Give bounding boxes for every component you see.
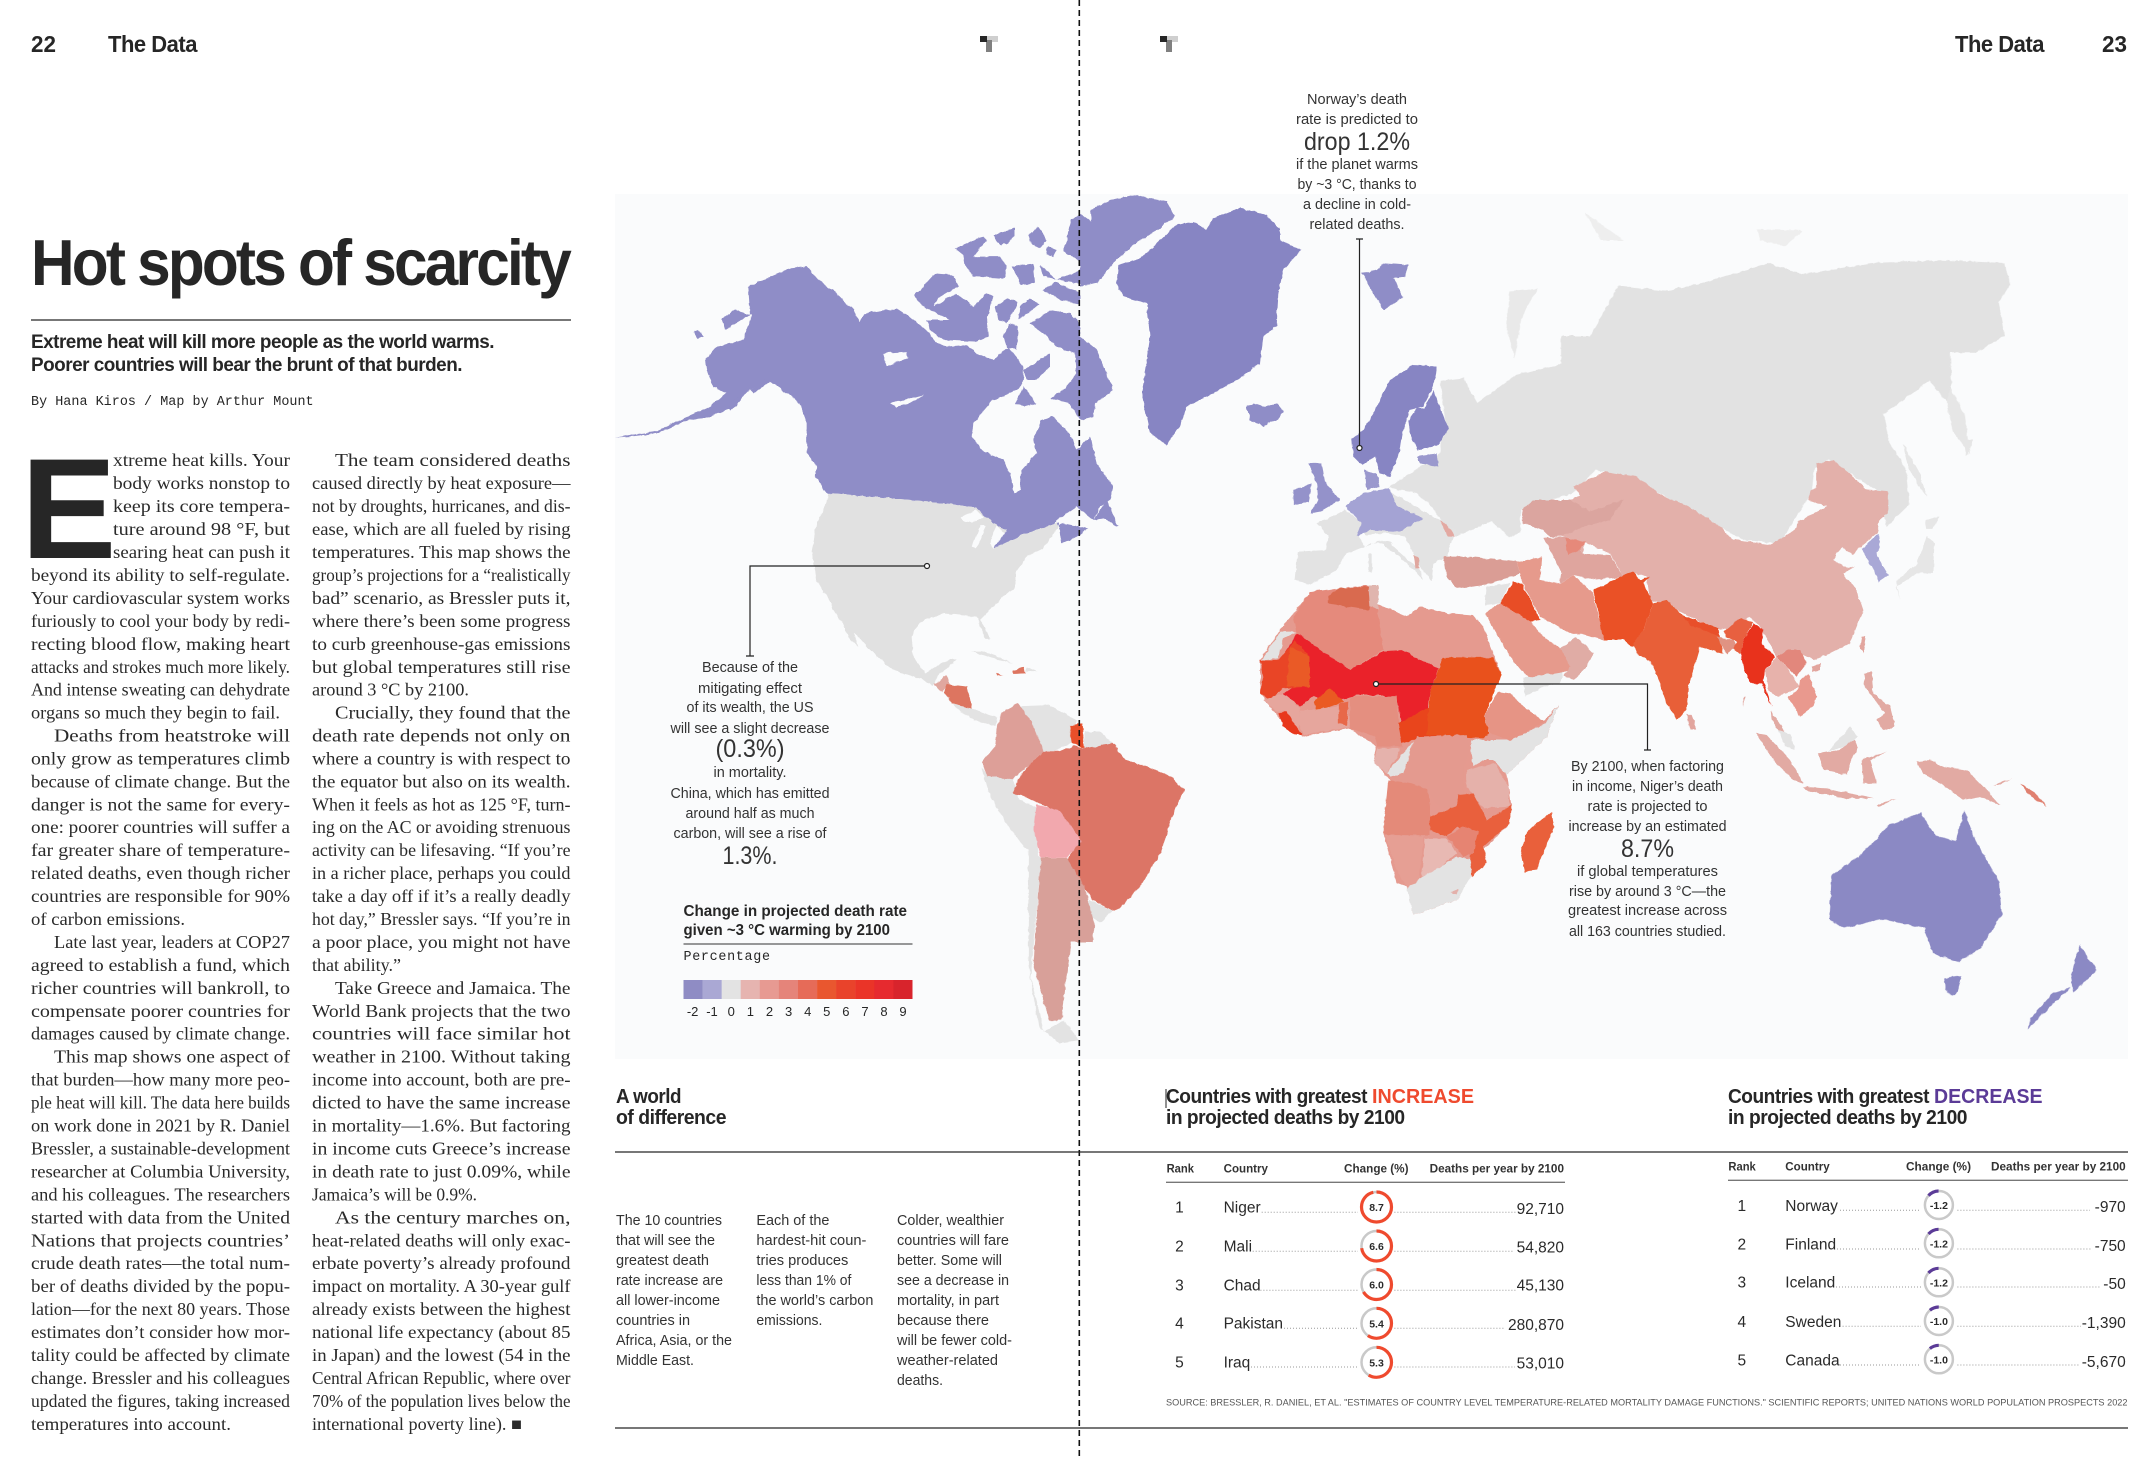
row: Mali: 54,820 xyxy=(1517,1240,1564,1257)
legend: death rate colour scale: 7 xyxy=(861,1004,869,1019)
table header: Change (%) xyxy=(1906,1162,1971,1174)
text block: description column 2: hardest-hit coun- xyxy=(756,1233,867,1249)
text block: description column 2: less than 1% of xyxy=(756,1273,852,1289)
body text column 1: tality could be affected by climate xyxy=(31,1345,290,1365)
body text column 2: take a day off if it’s a really deadly xyxy=(312,886,571,906)
body text column 2: where there’s been some progress xyxy=(312,611,571,631)
row: Iceland: Iceland xyxy=(1785,1275,1835,1292)
text block: description column 3: countries will fare xyxy=(897,1233,1009,1249)
row: Mali: Mali xyxy=(1224,1239,1252,1256)
row: Canada: Canada xyxy=(1785,1353,1840,1370)
icon: right T logo xyxy=(1160,36,1178,52)
body text column 1: of carbon emissions. xyxy=(31,909,185,929)
callout: Niger: if global temperatures xyxy=(1577,864,1718,880)
legend: death rate colour scale: 3 xyxy=(785,1004,792,1019)
callout: US and China xyxy=(670,564,930,870)
body text column 1: related deaths, even though richer xyxy=(31,863,290,883)
header: left page number and section: 22 xyxy=(31,31,56,57)
body text column 1: estimates don’t consider how mor- xyxy=(31,1322,290,1342)
body text column 1: one: poorer countries will suffer a xyxy=(31,817,290,837)
row: Chad: 45,130 xyxy=(1517,1278,1564,1295)
row: Mali: 6.6 xyxy=(1369,1241,1384,1253)
map: Africa xyxy=(1260,585,1558,915)
header: left page number and section xyxy=(31,31,198,57)
text block: description column 2: Each of the xyxy=(756,1213,829,1229)
callout: US and China: China, which has emitted xyxy=(670,786,830,802)
callout: US and China: will see a slight decrease xyxy=(670,721,830,737)
callout: Norway: Norway’s death xyxy=(1307,92,1407,108)
callout: Norway: related deaths. xyxy=(1310,217,1404,233)
text block: description column 2 xyxy=(756,1213,873,1329)
body text column 1: because of climate change. But the xyxy=(31,771,290,791)
map: China and Central Asia xyxy=(1522,440,1973,672)
row: Norway: -1.2 xyxy=(1930,1200,1948,1212)
body text column 2: dicted to have the same increase xyxy=(312,1093,571,1113)
body text column 1: only grow as temperatures climb xyxy=(31,748,290,768)
legend: death rate colour scale: 2 xyxy=(766,1004,773,1019)
legend: death rate colour scale: -1 xyxy=(706,1004,718,1019)
body text column 1: xtreme heat kills. Your xyxy=(113,450,290,470)
row: Norway xyxy=(1737,1185,2126,1225)
body text column 2: but global temperatures still rise xyxy=(312,657,571,677)
heading: greatest decrease xyxy=(1728,1086,2042,1129)
table header: Change (%) xyxy=(1344,1164,1409,1176)
legend: death rate colour scale: 5 xyxy=(823,1004,830,1019)
legend: death rate colour scale: Change in projected death rate xyxy=(684,903,907,920)
row: Finland xyxy=(1737,1224,2126,1263)
row: Chad xyxy=(1175,1270,1564,1300)
body text column 2 xyxy=(312,450,571,1434)
body text column 2: around 3 °C by 2100. xyxy=(312,680,469,700)
callout: Niger xyxy=(1374,682,1727,940)
row: Iraq: Iraq xyxy=(1224,1354,1250,1371)
body text column 2: that ability.” xyxy=(312,955,401,975)
callout: US and China: carbon, will see a rise of xyxy=(674,826,827,842)
text block: description column 3: see a decrease in xyxy=(897,1273,1009,1289)
body text column 2: 70% of the population lives below the xyxy=(312,1391,571,1411)
body text column 2: already exists between the highest xyxy=(312,1299,571,1319)
text block: description column 1: all lower-income xyxy=(616,1293,720,1309)
source note: SOURCE: BRESSLER, R. DANIEL, ET AL. "ESTIMATES OF COUNTRY LEVEL TEMPERATURE-RELATED MORTALITY DAMAGE FUNCTIONS." SCIENTIFIC REPORTS; UNITED NATIONS WORLD POPULATION PROSPECTS 2022 xyxy=(1166,1398,2128,1409)
row: Norway: Norway xyxy=(1785,1198,1838,1215)
callout: US and China: 1.3%. xyxy=(722,842,778,870)
body text column 1 xyxy=(31,450,290,1434)
body text column 1: Bressler, a sustainable-development xyxy=(31,1138,290,1158)
row: Chad: Chad xyxy=(1224,1278,1261,1295)
text block: description column 1: countries in xyxy=(616,1313,690,1329)
row: Iceland: -50 xyxy=(2103,1276,2126,1293)
legend: death rate colour scale: 4 xyxy=(804,1004,811,1019)
row: Mali xyxy=(1175,1231,1564,1261)
callout: US and China: of its wealth, the US xyxy=(686,700,814,716)
body text column 1: Your cardiovascular system works xyxy=(31,588,290,608)
callout: US and China: Because of the xyxy=(702,660,798,676)
body text column 2: impact on mortality. A 30-year gulf xyxy=(312,1276,571,1296)
body text column 1: temperatures into account. xyxy=(31,1414,231,1434)
callout: Niger: in income, Niger’s death xyxy=(1572,779,1723,795)
body text column 2: income into account, both are pre- xyxy=(312,1070,571,1090)
drop cap: E xyxy=(21,430,116,589)
body text column 1: recting blood flow, making heart xyxy=(31,634,290,654)
icon: left T logo xyxy=(980,36,998,52)
map: Russia and northern Asia xyxy=(1388,212,2010,544)
heading: greatest decrease: in projected deaths by 2100 xyxy=(1728,1107,1967,1129)
legend: death rate colour scale: -2 xyxy=(687,1004,698,1019)
body text column 1: change. Bressler and his colleagues xyxy=(31,1368,290,1388)
legend: death rate colour scale: 9 xyxy=(899,1004,907,1019)
callout: Norway xyxy=(1296,92,1418,450)
body text column 1: on work done in 2021 by R. Daniel xyxy=(31,1116,290,1136)
body text column 1: ture around 98 °F, but xyxy=(113,519,290,539)
header: left page number and section: The Data xyxy=(108,31,198,57)
body text column 1: This map shows one aspect of xyxy=(54,1047,290,1067)
text block: description column 3: mortality, in part xyxy=(897,1293,999,1309)
text block: description column 1: Africa, Asia, or the xyxy=(616,1333,732,1349)
body text column 1: compensate poorer countries for xyxy=(31,1001,290,1021)
body text column 2: ease, which are all fueled by rising xyxy=(312,519,571,539)
body text column 2: heat-related deaths will only exac- xyxy=(312,1230,571,1250)
row: Niger: 92,710 xyxy=(1517,1201,1564,1218)
body text column 2: As the century marches on, xyxy=(335,1207,570,1227)
body text column 1: damages caused by climate change. xyxy=(31,1024,290,1044)
heading: greatest increase xyxy=(1166,1086,1474,1129)
body text column 1: and his colleagues. The researchers xyxy=(31,1184,290,1204)
row: Iraq: 5.3 xyxy=(1369,1357,1384,1369)
body text column 2: hot day,” Bressler says. “If you’re in xyxy=(312,909,571,929)
row: Sweden: 4 xyxy=(1737,1314,1746,1331)
body text column 2: group’s projections for a “realistically xyxy=(312,565,571,585)
body text column 1: furiously to cool your body by redi- xyxy=(31,611,290,631)
body text column 1: body works nonstop to xyxy=(113,473,290,493)
text block: description column 1: The 10 countries xyxy=(616,1213,722,1229)
callout: US and China: around half as much xyxy=(686,806,814,822)
row: Sweden: -1,390 xyxy=(2082,1315,2126,1332)
row: Niger xyxy=(1175,1192,1564,1222)
heading: greatest decrease: DECREASE xyxy=(1934,1086,2042,1108)
callout: Niger: 8.7% xyxy=(1621,835,1674,863)
body text column 2: activity can be lifesaving. “If you’re xyxy=(312,840,571,860)
body text column 2: weather in 2100. Without taking xyxy=(312,1047,571,1067)
text block: description column 3: weather-related xyxy=(896,1353,998,1369)
callout: Norway: rate is predicted to xyxy=(1296,112,1418,128)
row: Niger: Niger xyxy=(1224,1200,1261,1217)
body text column 1: agreed to establish a fund, which xyxy=(31,955,290,975)
row: Niger: 1 xyxy=(1175,1200,1184,1217)
row: Iraq: 5 xyxy=(1175,1354,1184,1371)
row: Canada: 5 xyxy=(1737,1353,1746,1370)
text block: description column 1: that will see the xyxy=(616,1233,715,1249)
table header xyxy=(1728,1162,2128,1180)
table header: Rank xyxy=(1167,1164,1195,1176)
row: Finland: -1.2 xyxy=(1930,1238,1948,1250)
legend: death rate colour scale: Percentage xyxy=(684,950,770,965)
header: right page number and section xyxy=(1955,31,2127,57)
row: Iceland: 3 xyxy=(1737,1275,1746,1292)
map: Greenland and Northern Europe xyxy=(1000,195,1408,527)
callout: Norway: if the planet warms xyxy=(1296,157,1418,173)
body text column 1: Nations that projects countries’ xyxy=(31,1230,290,1250)
callout: Niger: rate is projected to xyxy=(1588,799,1708,815)
body text column 2: Jamaica’s will be 0.9%. xyxy=(312,1184,477,1204)
body text column 1: lation—for the next 80 years. Those xyxy=(31,1299,290,1319)
text block: description column 3: Colder, wealthier xyxy=(897,1213,1004,1229)
table header xyxy=(1166,1164,1565,1182)
body text column 1: ple heat will kill. The data here builds xyxy=(31,1093,290,1113)
map: South America xyxy=(981,703,1184,1043)
body text column 2: The team considered deaths xyxy=(335,450,571,470)
callout: Norway: by ~3 °C, thanks to xyxy=(1298,177,1416,193)
text block: description column 1: Middle East. xyxy=(616,1353,694,1369)
body text column 2: bad” scenario, as Bressler puts it, xyxy=(312,588,570,608)
body text column 2: in mortality—1.6%. But factoring xyxy=(312,1116,571,1136)
text block: description column 1: rate increase are xyxy=(616,1273,723,1289)
body text column 2: Crucially, they found that the xyxy=(335,702,571,722)
row: Iceland xyxy=(1737,1263,2126,1302)
body text column 2: a poor place, you might not have xyxy=(312,932,571,952)
callout: Niger: all 163 countries studied. xyxy=(1569,924,1726,940)
body text column 1: organs so much they begin to fail. xyxy=(31,702,280,722)
body text column 2: to curb greenhouse-gas emissions xyxy=(312,634,571,654)
heading: greatest increase: INCREASE xyxy=(1372,1086,1474,1108)
body text column 2: death rate depends not only on xyxy=(312,725,571,745)
text block: description column 2: the world’s carbon xyxy=(756,1293,873,1309)
body text column 2: countries will face similar hot xyxy=(312,1024,571,1044)
row: Canada: -1.0 xyxy=(1930,1354,1948,1366)
header: right page number and section: The Data xyxy=(1955,31,2045,57)
body text column 2: caused directly by heat exposure— xyxy=(312,473,571,493)
body text column 2: the equator but also on its wealth. xyxy=(312,771,570,791)
row: Pakistan: 4 xyxy=(1175,1316,1184,1333)
table header: Rank xyxy=(1728,1162,1756,1174)
body text column 1: Deaths from heatstroke will xyxy=(54,725,290,745)
row: Norway: -970 xyxy=(2095,1199,2126,1216)
row: Sweden: -1.0 xyxy=(1930,1316,1948,1328)
body text column 2: temperatures. This map shows the xyxy=(312,542,571,562)
body text column 2: in death rate to just 0.09%, while xyxy=(312,1161,571,1181)
body text column 1: beyond its ability to self-regulate. xyxy=(31,565,290,585)
body text column 1: started with data from the United xyxy=(31,1207,290,1227)
row: Chad: 3 xyxy=(1175,1278,1184,1295)
map: North America xyxy=(616,227,1113,687)
map: Middle East and South Asia xyxy=(1443,537,1723,730)
map: Europe xyxy=(1293,365,1562,585)
table: greatest increase xyxy=(1166,1164,1565,1377)
text block: description column 2: emissions. xyxy=(756,1313,822,1329)
map: Australia and New Zealand xyxy=(1829,810,2097,1029)
row: Norway: 1 xyxy=(1737,1198,1746,1215)
text block: description column 3: because there xyxy=(897,1313,989,1329)
row: Canada: -5,670 xyxy=(2082,1354,2126,1371)
body text column 1: Late last year, leaders at COP27 xyxy=(54,932,290,952)
body text column 2: erbate poverty’s already profound xyxy=(312,1253,571,1273)
callout: Norway: a decline in cold- xyxy=(1303,197,1411,213)
row: Iraq xyxy=(1175,1347,1564,1377)
row: Finland: Finland xyxy=(1785,1237,1836,1254)
body text column 1: far greater share of temperature- xyxy=(31,840,290,860)
table header: Deaths per year by 2100 xyxy=(1430,1164,1564,1176)
text block: description column 3: will be fewer cold- xyxy=(896,1333,1012,1349)
body text column 2: ing on the AC or avoiding strenuous xyxy=(312,817,571,837)
body text column 2: in Japan) and the lowest (54 in the xyxy=(312,1345,571,1365)
row: Sweden xyxy=(1737,1301,2126,1341)
legend: death rate colour scale: 8 xyxy=(880,1004,888,1019)
heading: A world of difference: A world xyxy=(616,1086,681,1108)
table: greatest decrease xyxy=(1728,1162,2128,1379)
body text column 2: When it feels as hot as 125 °F, turn- xyxy=(312,794,571,814)
table header: Country xyxy=(1785,1162,1830,1174)
row: Iraq: 53,010 xyxy=(1517,1356,1564,1373)
dashed fold line xyxy=(1078,0,1080,1460)
row: Chad: 6.0 xyxy=(1369,1280,1384,1292)
table header: Deaths per year by 2100 xyxy=(1991,1162,2126,1174)
header: right page number and section: 23 xyxy=(2102,31,2127,57)
body text column 2: not by droughts, hurricanes, and dis- xyxy=(312,496,571,516)
body text column 1: researcher at Columbia University, xyxy=(31,1161,290,1181)
callout: Niger: increase by an estimated xyxy=(1568,819,1726,835)
body text column 1: And intense sweating can dehydrate xyxy=(31,680,290,700)
byline: By Hana Kiros / Map by Arthur Mount xyxy=(31,395,314,410)
heading: greatest decrease: Countries with greatest xyxy=(1728,1086,1930,1108)
body text column 1: countries are responsible for 90% xyxy=(31,886,290,906)
body text column 2: Central African Republic, where over xyxy=(312,1368,571,1388)
callout: Norway: drop 1.2% xyxy=(1304,128,1410,156)
callout: Niger: rise by around 3 °C—the xyxy=(1569,884,1726,900)
map: Southeast Asia xyxy=(1717,618,2047,807)
map: Central America xyxy=(934,675,998,726)
legend: death rate colour scale: given ~3 °C warming by 2100 xyxy=(684,922,890,939)
heading: A world of difference xyxy=(616,1086,726,1129)
heading: A world of difference: of difference xyxy=(616,1107,726,1129)
callout: Niger: By 2100, when factoring xyxy=(1571,759,1724,775)
row: Canada xyxy=(1737,1340,2126,1379)
callout: Niger: greatest increase across xyxy=(1568,903,1727,919)
text block: description column 2: tries produces xyxy=(756,1253,848,1269)
text block: description column 1: greatest death xyxy=(616,1253,709,1269)
subheading xyxy=(31,332,494,376)
body text column 2: in a richer place, perhaps you could xyxy=(312,863,571,883)
legend: death rate colour scale: 0 xyxy=(728,1004,735,1019)
legend: death rate colour scale: 1 xyxy=(747,1004,754,1019)
body text column 1: danger is not the same for every- xyxy=(31,794,290,814)
text block: description column 3: deaths. xyxy=(897,1373,943,1389)
table header: Country xyxy=(1224,1164,1269,1176)
row: Mali: 2 xyxy=(1175,1239,1184,1256)
row: Iceland: -1.2 xyxy=(1930,1277,1948,1289)
row: Pakistan: 5.4 xyxy=(1369,1318,1384,1330)
body text column 1: searing heat can push it xyxy=(113,542,290,562)
panel: world map xyxy=(615,194,2128,1059)
legend: death rate colour scale: 6 xyxy=(842,1004,850,1019)
text block: description column 1 xyxy=(616,1213,732,1369)
subheading: Extreme heat will kill more people as the world warms. xyxy=(31,332,494,353)
body text column 2: World Bank projects that the two xyxy=(312,1001,571,1021)
body text column 1: crude death rates—the total num- xyxy=(31,1253,290,1273)
body text column 1: ber of deaths divided by the popu- xyxy=(31,1276,290,1296)
callout: US and China: mitigating effect xyxy=(698,681,802,697)
subheading: Poorer countries will bear the brunt of that burden. xyxy=(31,355,462,376)
row: Pakistan: Pakistan xyxy=(1224,1316,1283,1333)
callout: US and China: in mortality. xyxy=(714,765,786,781)
body text column 1: that burden—how many more peo- xyxy=(31,1070,290,1090)
row: Finland: 2 xyxy=(1737,1237,1746,1254)
title: Hot spots of scarcity xyxy=(31,226,572,299)
row: Finland: -750 xyxy=(2095,1238,2126,1255)
body text column 2: Take Greece and Jamaica. The xyxy=(335,978,571,998)
legend: death rate colour scale xyxy=(684,903,912,1019)
text block: description column 3 xyxy=(896,1213,1012,1389)
row: Niger: 8.7 xyxy=(1369,1202,1384,1214)
body text column 2: international poverty line). ■ xyxy=(312,1414,522,1434)
heading: greatest increase: Countries with greatest xyxy=(1166,1086,1368,1108)
body text column 1: updated the figures, taking increased xyxy=(31,1391,290,1411)
row: Pakistan: 280,870 xyxy=(1508,1317,1564,1334)
body text column 1: keep its core tempera- xyxy=(113,496,290,516)
body text column 1: attacks and strokes much more likely. xyxy=(31,657,290,677)
text block: description column 3: better. Some will xyxy=(897,1253,1002,1269)
body text column 2: where a country is with respect to xyxy=(312,748,571,768)
heading: greatest increase: in projected deaths by 2100 xyxy=(1166,1107,1405,1129)
row: Pakistan xyxy=(1175,1308,1564,1338)
row: Sweden: Sweden xyxy=(1785,1314,1841,1331)
body text column 2: in income cuts Greece’s increase xyxy=(312,1138,571,1158)
body text column 1: richer countries will bankroll, to xyxy=(31,978,290,998)
body text column 2: national life expectancy (about 85 xyxy=(312,1322,571,1342)
callout: US and China: (0.3%) xyxy=(716,735,784,763)
